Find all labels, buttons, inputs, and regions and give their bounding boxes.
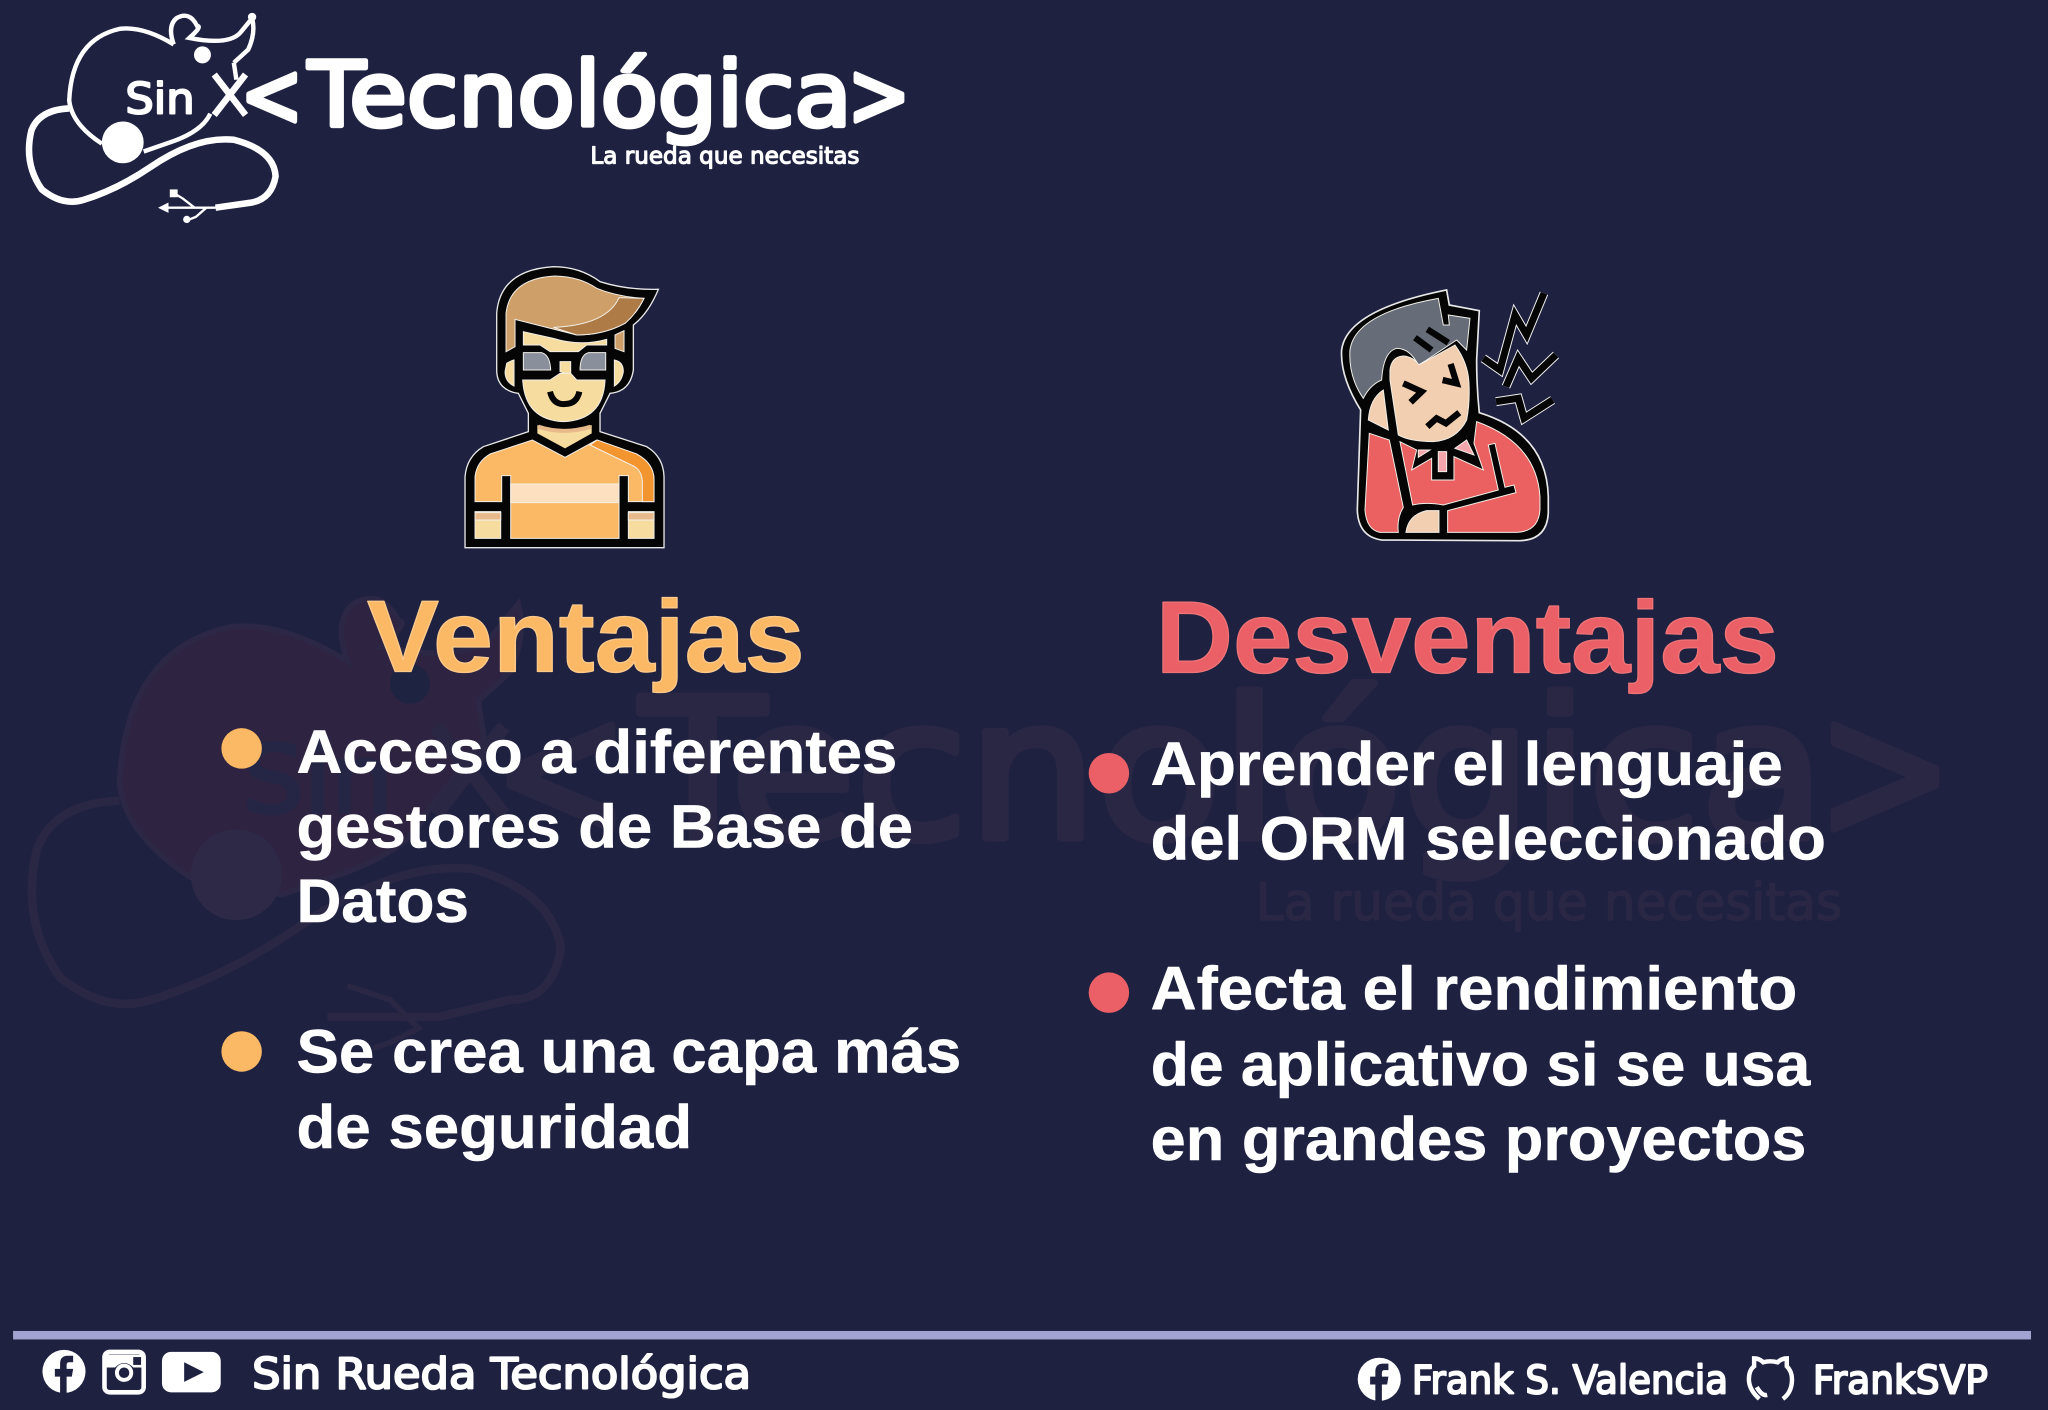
list item 1 [1151,730,1826,873]
logo bracket left: < [240,43,303,146]
list item 1: del ORM seleccionado [1151,804,1826,873]
list item 1 [296,718,913,936]
wheel [102,121,144,163]
nose [248,13,256,21]
footer text: channel: Sin Rueda Tecnológica [252,1349,751,1399]
bullet [221,728,262,769]
list item 1: gestores de Base de [296,793,913,862]
logo bracket right: > [848,43,910,146]
logo word: Sin: Sin [125,75,195,125]
logo word: Tecnológica: Tecnológica [307,43,852,146]
watermark logo: Sin [242,726,393,835]
list item 2: en grandes proyectos [1151,1105,1806,1174]
heading: Desventajas: Desventajas [1156,581,1779,695]
list item 2: de aplicativo si se usa [1151,1030,1811,1099]
footer text: github user: FrankSVP [1813,1359,1988,1404]
watermark logo [32,598,1953,1048]
list item 1: Datos [296,867,469,936]
list item 2 [296,1017,961,1162]
watermark logo: > [1817,658,1953,884]
bullet [1089,972,1129,1013]
icon: stressed man with headache [1342,290,1556,541]
list item 2 [1151,955,1811,1174]
icon: youtube [162,1352,221,1392]
footer text: author: Frank S. Valencia [1412,1359,1728,1404]
logo tagline: La rueda que necesitas [590,141,859,169]
usb plug [158,189,216,223]
icon: github [1749,1358,1792,1399]
list item 2: Se crea una capa más [296,1017,961,1086]
icon: instagram [104,1352,144,1392]
panel: ventajas list [221,718,961,1162]
list item 2: Afecta el rendimiento [1151,955,1797,1024]
bullet [221,1031,262,1072]
icon: happy man with glasses [465,267,664,548]
bullet [1089,753,1129,793]
icon: facebook [42,1350,86,1394]
usb cable [29,108,276,208]
icon: facebook author [1358,1358,1401,1401]
watermark logo: < [493,658,629,884]
list item 1: Aprender el lenguaje [1151,730,1783,799]
eye [194,46,211,63]
heading: Ventajas: Ventajas [367,579,805,693]
panel: desventajas list [1089,730,1826,1174]
footer [13,1331,2031,1404]
watermark logo: Tecnológica [640,658,1825,884]
logo cross [214,74,246,115]
watermark logo: La rueda que necesitas [1256,873,1842,933]
mouse head outline [69,16,253,152]
list item 1: Acceso a diferentes [296,718,897,787]
logo [29,13,910,223]
list item 2: de seguridad [296,1093,692,1162]
